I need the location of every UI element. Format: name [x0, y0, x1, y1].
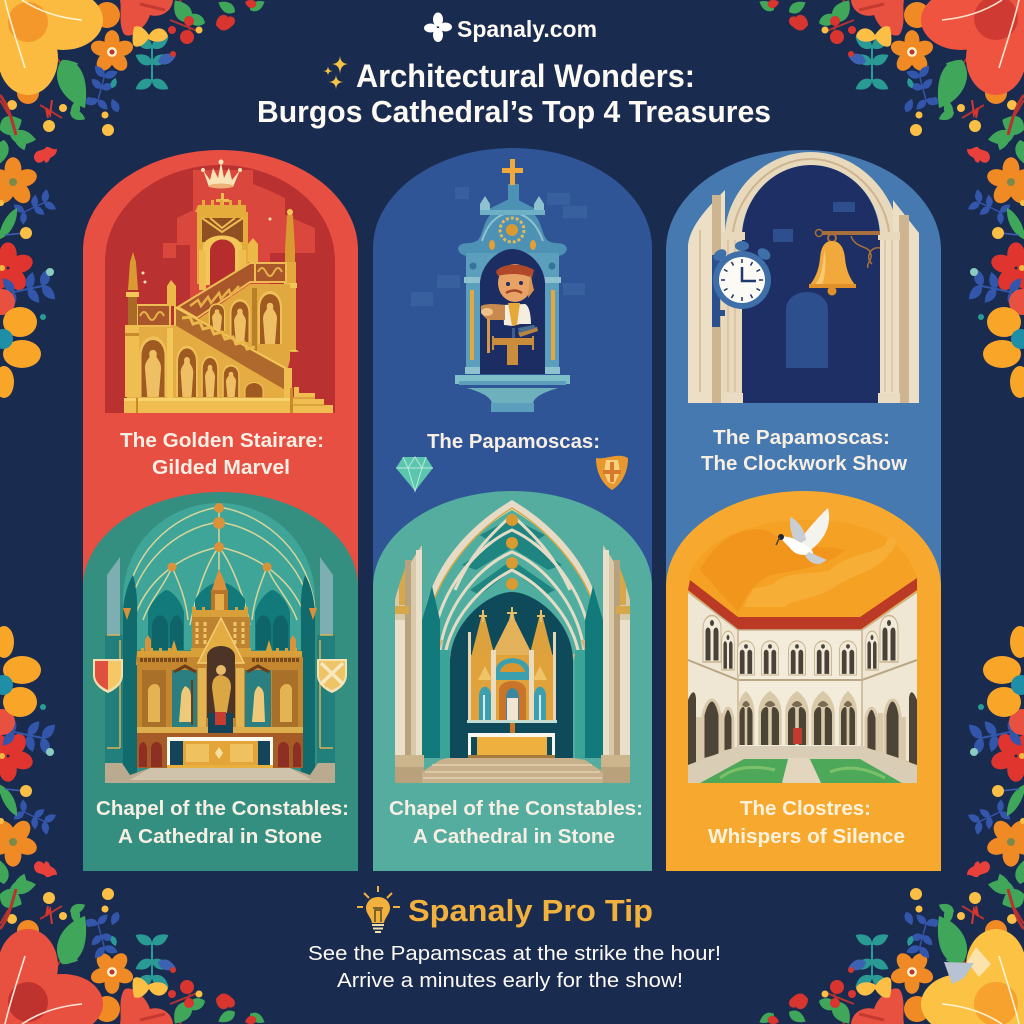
- archway dark interior: [742, 165, 880, 403]
- card label: Clostres: Whispers of Silence: [708, 825, 905, 848]
- altarpiece: [467, 607, 557, 758]
- roof: [688, 578, 917, 630]
- right piers: [601, 545, 630, 783]
- side bays: [422, 586, 440, 758]
- floor: [105, 763, 335, 783]
- card label: Chapel one: A Cathedral in Stone: [118, 825, 322, 848]
- left rail and pier: [137, 305, 170, 326]
- upper wall: [197, 284, 290, 380]
- figure: [481, 264, 538, 365]
- lower stair balustrade: [175, 307, 285, 391]
- dark centre: [450, 592, 573, 758]
- card label: Chapel two: Chapel of the Constables:: [389, 797, 643, 820]
- faint bricks: [411, 187, 587, 306]
- icon: shield: [596, 456, 628, 490]
- card label: Clostres: [708, 797, 905, 848]
- pro tip: [308, 886, 721, 992]
- upper tower: [216, 193, 229, 208]
- card label: Golden Stairare: The Golden Stairare:: [120, 429, 324, 452]
- middle finial: [248, 238, 258, 262]
- upper windows: [703, 616, 898, 675]
- card label: Golden Stairare: Gilded Marvel: [152, 456, 290, 479]
- left piers: [395, 545, 424, 783]
- lower arcade: [688, 691, 917, 767]
- panel: cloisters: [666, 491, 941, 871]
- vault ribs: [422, 500, 603, 664]
- panel: Papamoscas figure: [373, 148, 652, 620]
- staircase illustration: [124, 193, 333, 413]
- panel: Chapel of the Constables (ornate): [83, 492, 358, 871]
- pro tip: Spanaly Pro Tip: [408, 893, 653, 928]
- icon: clock: [711, 241, 773, 327]
- pro tip: Arrive a minutes early for the show!: [337, 970, 683, 992]
- panel: Chapel of the Constables (vaulted nave): [373, 491, 652, 871]
- lower niches: [139, 336, 167, 397]
- logo: Spanaly.com: Spanaly.com: [457, 16, 597, 42]
- card label: Clockwork Show: The Clockwork Show: [701, 452, 907, 475]
- card label: Chapel two: [389, 797, 643, 848]
- lower wall: [127, 325, 295, 398]
- floral corner: top left: [0, 0, 267, 398]
- panel: bell and clock: [666, 150, 941, 620]
- reredos: [136, 569, 303, 768]
- floral corner: top right: [757, 0, 1024, 398]
- sky: [688, 520, 917, 620]
- upper stair balustrade: [178, 263, 255, 318]
- icon: gem: [396, 457, 433, 491]
- card label: Chapel one: [96, 797, 349, 848]
- icon: sparkles: [323, 55, 349, 90]
- building silhouette: [163, 170, 315, 300]
- upper landing rail: [254, 263, 286, 282]
- vault: [123, 503, 315, 650]
- icon: dove: [776, 508, 829, 564]
- card label: Golden Stairare: [120, 429, 324, 479]
- floral corner: bottom left: [0, 626, 267, 1024]
- courtyard: [688, 746, 917, 783]
- icon: light bulb: [357, 886, 400, 933]
- card label: Papamoscas: The Papamoscas:: [427, 430, 600, 453]
- title: [257, 55, 771, 129]
- pro tip: See the Papamscas at the strike the hour!: [308, 943, 721, 965]
- dark windows: [148, 582, 290, 650]
- walls: [688, 592, 738, 764]
- title: Architectural Wonders:: [356, 58, 695, 94]
- niche clock tower: [455, 159, 570, 412]
- card label: Clockwork Show: [701, 426, 907, 475]
- card label: Chapel one: Chapel of the Constables:: [96, 797, 349, 820]
- card label: Clostres: The Clostres:: [740, 797, 871, 820]
- alcove background: [105, 165, 335, 413]
- icon: crown: [201, 160, 242, 188]
- card label: Chapel two: A Cathedral in Stone: [413, 825, 615, 848]
- stone arch: [725, 152, 898, 232]
- icon: bell: [809, 230, 880, 296]
- card label: Clockwork Show: The Papamoscas:: [713, 426, 890, 449]
- steps: [422, 758, 603, 783]
- shield: red and gold: [93, 659, 123, 693]
- panel: golden staircase: [83, 150, 358, 620]
- right spire: [285, 208, 295, 262]
- ghost door: [786, 292, 828, 368]
- floral corner: bottom right: [757, 626, 1024, 1024]
- clouds: [744, 538, 896, 607]
- title: Burgos Cathedral’s Top 4 Treasures: [257, 94, 771, 129]
- side piers and windows: [123, 575, 137, 778]
- newel and steps: [284, 368, 292, 398]
- shield: gold cross: [317, 659, 347, 693]
